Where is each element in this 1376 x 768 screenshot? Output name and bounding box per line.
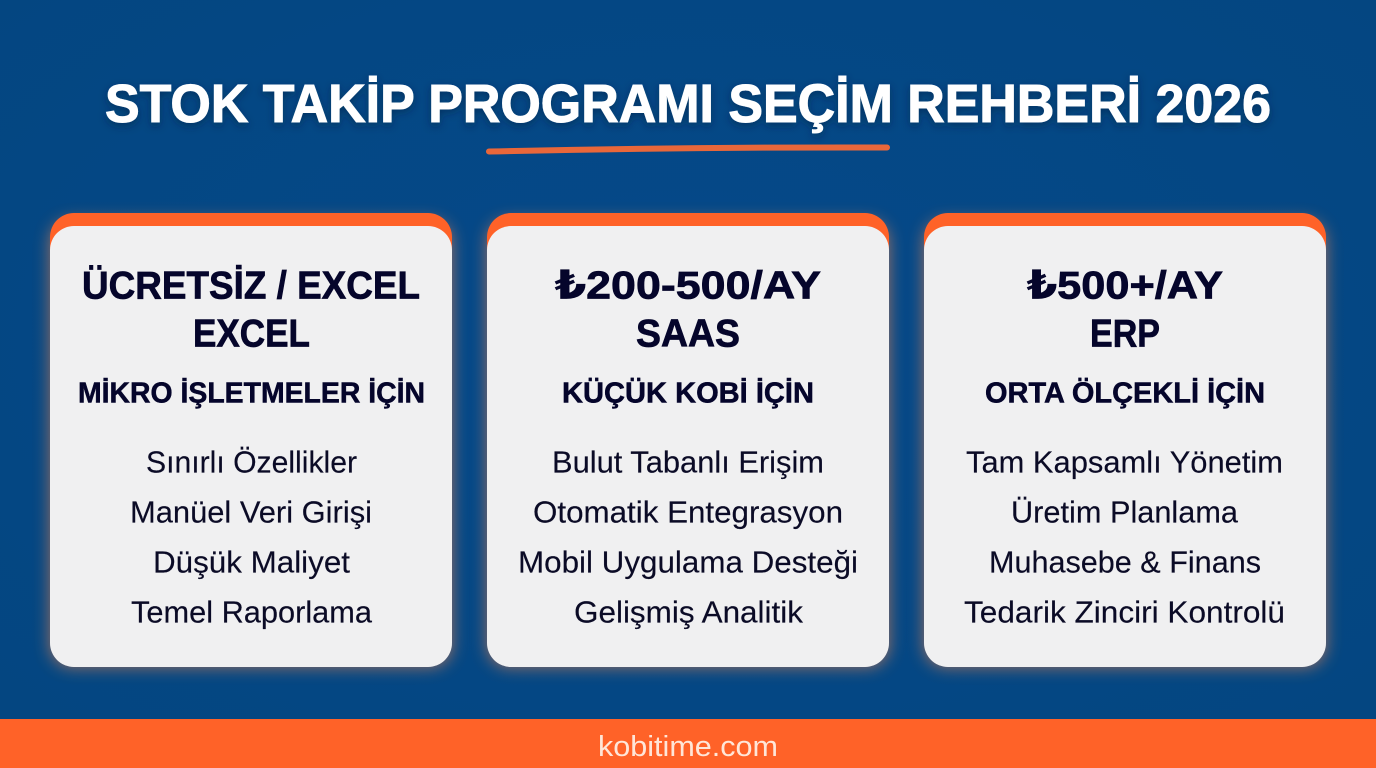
- feature list: Üretim Planlama: [1011, 494, 1239, 530]
- feature list: Mobil Uygulama Desteği: [518, 544, 858, 580]
- feature list: Temel Raporlama: [131, 594, 373, 630]
- feature list: [130, 444, 373, 630]
- title underline: [489, 147, 887, 152]
- price heading: EXCEL: [193, 312, 310, 356]
- feature list: Tedarik Zinciri Kontrolü: [964, 594, 1285, 630]
- feature list: Tam Kapsamlı Yönetim: [966, 444, 1283, 480]
- feature list: Manüel Veri Girişi: [130, 494, 372, 530]
- feature list: [964, 444, 1285, 630]
- feature list: Bulut Tabanlı Erişim: [552, 444, 824, 480]
- price heading: [82, 264, 420, 356]
- title: STOK TAKİP PROGRAMI SEÇİM REHBERİ 2026: [105, 74, 1271, 134]
- price heading: SAAS: [636, 312, 740, 356]
- feature list: Sınırlı Özellikler: [146, 444, 357, 480]
- feature list: Düşük Maliyet: [153, 544, 350, 580]
- audience subtitle: KÜÇÜK KOBİ İÇİN: [562, 378, 814, 410]
- price heading: [1027, 264, 1223, 356]
- audience subtitle: MİKRO İŞLETMELER İÇİN: [78, 378, 425, 410]
- price heading: ÜCRETSİZ / EXCEL: [82, 264, 420, 308]
- price heading: ERP: [1090, 312, 1160, 356]
- price heading: ₺200-500/AY: [555, 264, 821, 308]
- feature list: Gelişmiş Analitik: [574, 594, 803, 630]
- price heading: ₺500+/AY: [1027, 264, 1223, 308]
- panel: erp: [924, 213, 1326, 667]
- feature list: [518, 444, 858, 630]
- feature list: Muhasebe & Finans: [989, 544, 1261, 580]
- footer bar: [0, 719, 1376, 768]
- panel: saas: [487, 213, 889, 667]
- audience subtitle: ORTA ÖLÇEKLİ İÇİN: [985, 378, 1265, 410]
- footer website: kobitime.com: [598, 731, 778, 763]
- feature list: Otomatik Entegrasyon: [533, 494, 843, 530]
- panel: free / excel: [50, 213, 452, 667]
- price heading: [555, 264, 821, 356]
